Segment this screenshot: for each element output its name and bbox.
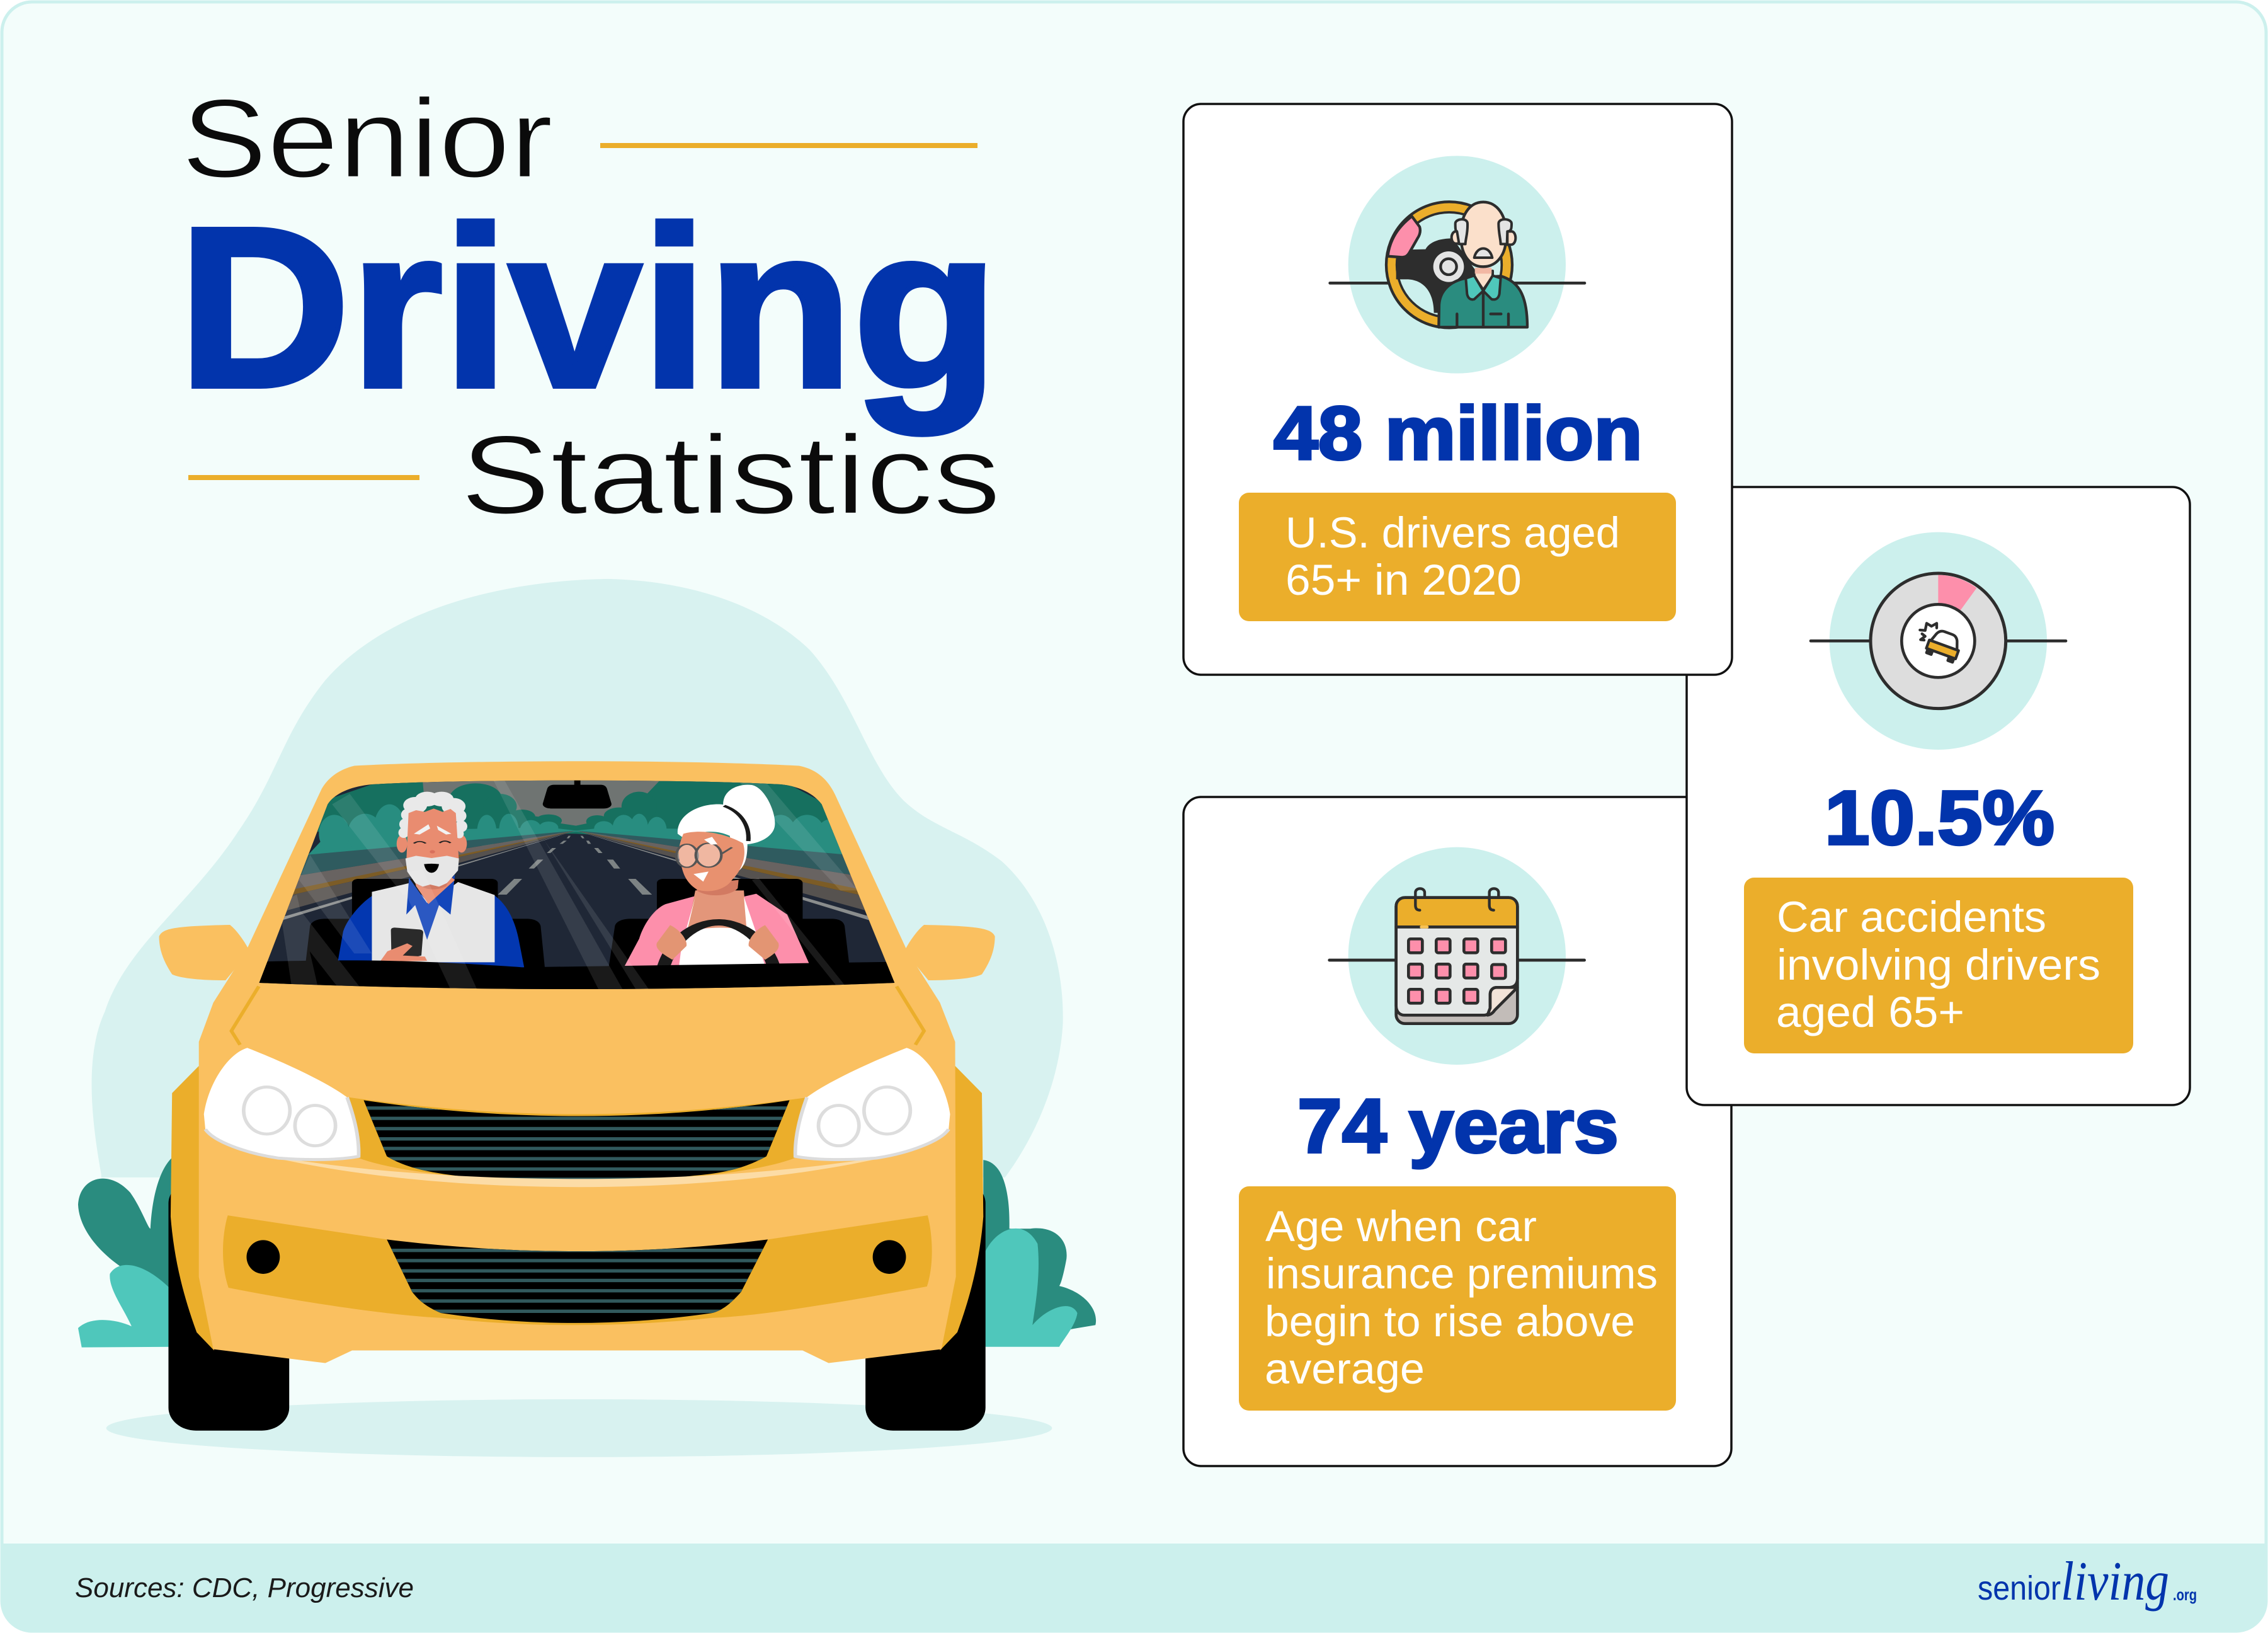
card frame xyxy=(1183,104,1732,675)
neck xyxy=(414,877,455,904)
icon: senior driver with steering wheel xyxy=(1330,156,1585,374)
ears xyxy=(397,835,407,852)
caption text: insurance premiums xyxy=(1266,1249,1658,1298)
lower grille xyxy=(387,1239,768,1323)
vest xyxy=(372,882,494,962)
caption text: Car accidents xyxy=(1777,893,2046,941)
left wheel xyxy=(168,1181,289,1431)
cardigan xyxy=(624,894,809,968)
face xyxy=(679,832,744,891)
logo: seniorliving.org: senior xyxy=(1978,1569,2061,1607)
left verge band xyxy=(300,830,576,875)
caption text: Age when car xyxy=(1265,1202,1537,1251)
car body xyxy=(199,761,956,1363)
card: 48 million xyxy=(1183,104,1732,675)
phone xyxy=(391,927,423,960)
stat: 48 million: 48 million xyxy=(1274,391,1643,476)
caption text: involving drivers xyxy=(1777,941,2100,989)
title rule bottom xyxy=(188,475,419,480)
left plant xyxy=(78,1156,174,1348)
glasses xyxy=(676,843,732,868)
caption text xyxy=(1285,508,1620,604)
headband xyxy=(724,806,748,841)
windshield xyxy=(259,780,894,989)
footer band xyxy=(0,1544,2268,1633)
phone hand xyxy=(380,943,427,962)
title xyxy=(178,76,1001,537)
left front seat xyxy=(305,879,545,970)
right headlight xyxy=(795,1048,950,1160)
icon: calendar xyxy=(1330,847,1585,1065)
source note: Sources: CDC, Progressive xyxy=(75,1573,414,1603)
woman xyxy=(624,785,809,970)
eyes xyxy=(414,841,450,844)
body side shade right xyxy=(940,1066,983,1350)
white top xyxy=(681,897,763,966)
caption text: aged 65+ xyxy=(1776,988,1964,1036)
card frame xyxy=(1687,487,2190,1105)
title word: Senior: Senior xyxy=(181,76,553,201)
title word: Statistics: Statistics xyxy=(460,412,1001,537)
steering wheel xyxy=(663,922,775,970)
left fog light xyxy=(246,1240,280,1274)
left hand xyxy=(656,925,687,960)
eyebrow and smile xyxy=(693,837,717,881)
eyebrows xyxy=(414,824,452,835)
hood crease lines xyxy=(231,987,924,1045)
card: 74 years xyxy=(1183,797,1731,1466)
man xyxy=(338,792,524,968)
right white line xyxy=(576,830,872,921)
neck and chest xyxy=(688,890,746,928)
body side shade left xyxy=(171,1066,214,1350)
caption text: U.S. drivers aged xyxy=(1285,508,1620,557)
stat: 10.5%: 10.5% xyxy=(1825,775,2054,861)
upper grille surround xyxy=(340,1096,817,1181)
rear-view mirror xyxy=(543,779,612,808)
caption text: begin to rise above xyxy=(1265,1297,1635,1346)
caption text xyxy=(1265,1202,1658,1393)
right wheel xyxy=(865,1181,986,1431)
right front seat xyxy=(608,879,850,970)
ground shadow xyxy=(106,1399,1052,1457)
background blob xyxy=(91,579,1063,1177)
hair bun xyxy=(723,785,775,844)
title rule top xyxy=(600,143,977,148)
dashboard xyxy=(253,960,902,994)
face xyxy=(406,808,459,861)
mouth xyxy=(424,864,439,873)
upper grille xyxy=(364,1100,790,1179)
hair xyxy=(399,792,467,839)
left white line xyxy=(282,830,576,920)
beard xyxy=(406,856,459,886)
caption text: 65+ in 2020 xyxy=(1285,556,1522,604)
sweater xyxy=(338,895,524,968)
far trees xyxy=(305,781,858,849)
stat: 74 years: 74 years xyxy=(1297,1083,1619,1169)
hair xyxy=(678,805,748,873)
right plant xyxy=(983,1160,1096,1347)
left mirror xyxy=(159,925,249,980)
right hand xyxy=(749,925,779,960)
caption text xyxy=(1776,893,2100,1036)
logo: seniorliving.org: living xyxy=(2061,1551,2169,1612)
windshield glare xyxy=(279,780,858,991)
right verge band xyxy=(576,830,854,875)
right grey verge xyxy=(576,830,862,890)
icon: donut with car crash xyxy=(1811,532,2066,750)
lower bumper recess xyxy=(223,1215,932,1325)
left grey verge xyxy=(292,830,576,890)
sky xyxy=(416,779,752,830)
caption box xyxy=(1239,1186,1676,1411)
shirt xyxy=(406,874,455,940)
left gold stripe xyxy=(292,830,576,895)
caption box xyxy=(1239,493,1676,621)
card frame xyxy=(1183,797,1731,1466)
left headlight xyxy=(204,1048,359,1160)
hood highlight xyxy=(253,1153,904,1187)
logo: seniorliving.org: .org xyxy=(2173,1585,2197,1604)
near trees xyxy=(308,805,847,855)
right shoulder xyxy=(576,830,869,912)
title word: Driving: Driving xyxy=(178,180,998,436)
illustration: car with senior couple xyxy=(78,579,1096,1457)
lane dashes xyxy=(498,836,652,895)
caption box xyxy=(1744,878,2133,1053)
caption text: average xyxy=(1265,1344,1425,1393)
right fog light xyxy=(873,1240,906,1274)
road xyxy=(259,780,894,989)
left shoulder xyxy=(283,830,576,912)
card: 10.5% xyxy=(1687,487,2190,1105)
logo: seniorliving.org xyxy=(1978,1551,2197,1612)
right mirror xyxy=(904,925,995,980)
right gold stripe xyxy=(576,830,862,896)
car scene layer in overview coordinates xyxy=(78,579,1096,1457)
